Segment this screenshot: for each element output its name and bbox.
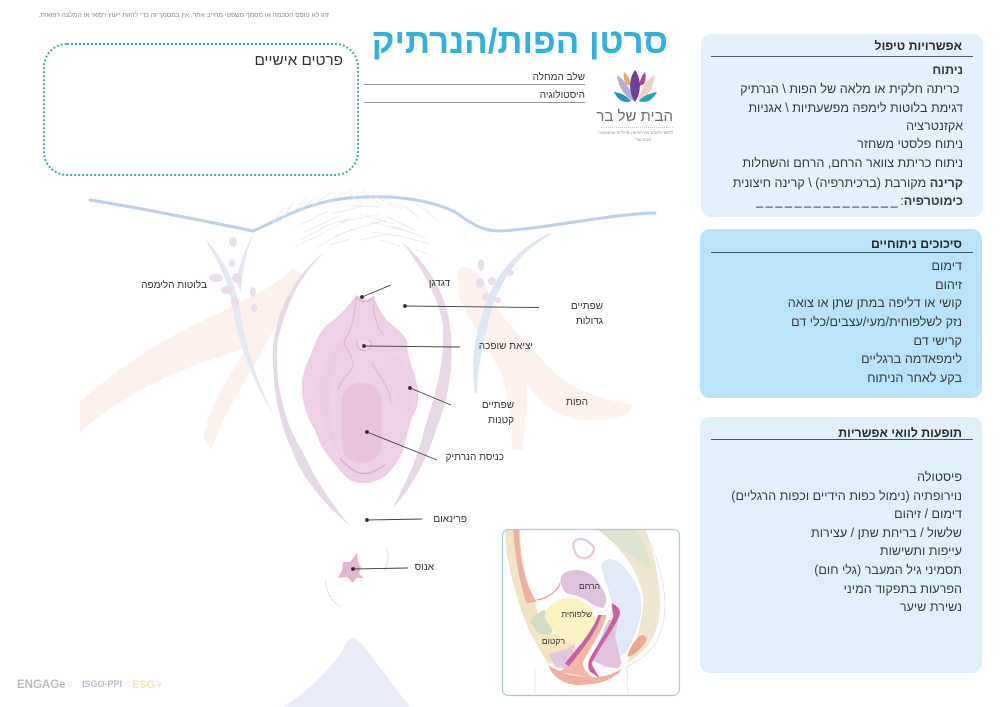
title: סרטן הפות/הנרתיק	[372, 22, 668, 61]
disease stage field	[364, 69, 585, 85]
logo: lotus house	[596, 70, 673, 142]
labia outer curve right	[393, 242, 452, 508]
label: rectum: רקטום	[542, 636, 565, 646]
surgical risks list: זיהום	[935, 278, 962, 292]
waist line	[90, 197, 655, 231]
leader lines	[352, 285, 539, 570]
histology field	[364, 87, 585, 103]
treatment list: קרינה מקורבת (ברכיתרפיה) \ קרינה חיצונית	[733, 176, 963, 190]
logo: lotus house: הבית שלי	[635, 137, 651, 142]
label: vaginal opening: כניסת הנרתיק	[446, 452, 504, 463]
footer logos	[17, 679, 163, 691]
label: clitoris: דגדגן	[429, 278, 450, 289]
treatment list: דגימת בלוטות לימפה מפשעתיות \ אגניות	[748, 101, 963, 115]
side effects list: עייפות ותשישות	[880, 544, 962, 558]
logo rule and tagline	[601, 127, 673, 128]
side effects list: הפרעות בתפקוד המיני	[844, 582, 962, 596]
label: labia minora: קטנות	[488, 414, 514, 426]
anus	[338, 553, 364, 583]
pubic hair	[272, 188, 439, 254]
treatment list: ניתוח כריתת צוואר הרחם, הרחם והשחלות	[742, 156, 963, 170]
surgical risks list: נזק לשלפוחית/מעי/עצבים/כלי דם	[791, 315, 962, 329]
label: labia majora: גדולות	[576, 316, 603, 327]
treatment heading: אפשרויות טיפול	[875, 39, 962, 53]
side effects list: שלשול / בריחת שתן / עצירות	[811, 526, 962, 540]
surgical risks list: בקע לאחר הניתוח	[867, 371, 962, 385]
side effects list	[731, 470, 962, 614]
logo: ENGAGe: ENGAGe♀	[17, 679, 74, 691]
treatment list: ניתוח	[932, 63, 963, 77]
surgical risks list: לימפאדמה ברגליים	[861, 352, 962, 366]
label: labia majora	[571, 301, 603, 327]
label: urethra: יציאת שופכה	[479, 341, 533, 352]
groin crease left	[203, 233, 276, 420]
logo: lotus house: ללמוד ולאהוב את החיים | מיילדות וגינקולוגיה	[598, 130, 673, 135]
lymph nodes	[209, 237, 514, 312]
logo name: הבית של בר	[596, 108, 673, 125]
side effects list: נוירופתיה (נימול כפות הידיים וכפות הרגליים)	[731, 489, 962, 503]
treatment list: כריתה חלקית או מלאה של הפות \ הנרתיק	[740, 82, 960, 96]
vulva	[302, 295, 418, 483]
side effects list: נשירת שיער	[900, 600, 962, 614]
panel: surgical risks	[700, 229, 982, 398]
icon: lotus	[614, 70, 657, 102]
label: uterus: הרחם	[579, 581, 600, 591]
surgical risks list: קושי או דליפה במתן שתן או צואה	[788, 296, 962, 310]
label: vulva: הפות	[566, 397, 588, 408]
treatment list	[733, 63, 963, 208]
logo: ESGO: ESG♀	[132, 679, 163, 691]
label: anus: אנוס	[415, 562, 434, 573]
surgical risks list: קרישי דם	[913, 334, 962, 348]
treatment list: כימוטרפיה:_______________	[756, 194, 963, 208]
side effects list: תסמיני גיל המעבר (גלי חום)	[814, 563, 962, 577]
label: labia minora: שפתיים	[482, 400, 514, 411]
personal details heading: פרטים אישיים	[254, 52, 343, 69]
label: labia majora: שפתיים	[571, 301, 603, 312]
surgical risks list: דימום	[932, 259, 962, 273]
label: lymph nodes: בלוטות הלימפה	[141, 280, 207, 291]
groin crease right	[474, 234, 550, 393]
surgical risks list	[788, 259, 962, 385]
surgical risks heading: סיכוכים ניתוחיים	[871, 237, 962, 251]
personal details box	[43, 43, 359, 176]
panel: treatment options	[701, 34, 983, 217]
treatment list: אקזנטרציה	[906, 119, 963, 133]
side effects heading: תופעות לוואי אפשריות	[838, 426, 962, 440]
treatment list: ניתוח פלסטי משחזר	[857, 137, 963, 151]
label: perineum: פרינאום	[433, 514, 467, 525]
side effects list: דימום / זיהום	[894, 507, 962, 521]
peach thigh left	[80, 268, 303, 450]
label: bladder: שלפוחית	[561, 609, 592, 619]
panel: possible side effects	[700, 417, 982, 673]
histology label: היסטולוגיה	[540, 90, 585, 101]
illustration: vulva anatomy	[80, 188, 680, 707]
disclaimer: זהו לא טופס הסכמה או מסמך משפטי מחייב אחר. אין במסמך זה כדי להוות ייעוץ רפואי או המלצה רפואית.	[38, 12, 329, 19]
labia outer curve left	[273, 252, 350, 526]
peach thigh right	[457, 267, 632, 450]
lower body shape	[283, 638, 410, 707]
side effects list: פיסטולה	[917, 470, 962, 484]
pelvis cross-section inset	[502, 530, 680, 696]
disease stage label: שלב המחלה	[533, 72, 585, 83]
logo: ISGO-PPI: ISGO-PPI	[82, 679, 122, 689]
label: labia minora	[482, 400, 514, 426]
